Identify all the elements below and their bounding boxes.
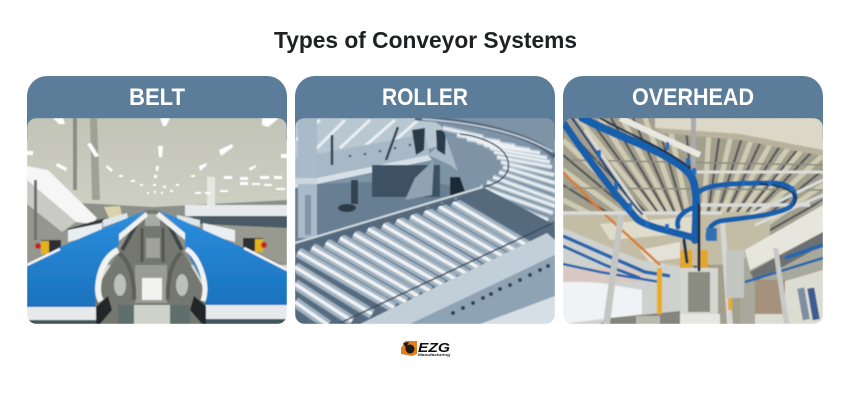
machinery [372, 165, 440, 197]
title: Types of Conveyor Systems [274, 27, 577, 53]
emergency boxes [41, 240, 61, 254]
panel: belt [27, 76, 287, 324]
lower right wall [740, 200, 823, 324]
white belt rollers [98, 250, 118, 301]
icon: logo mark [401, 341, 417, 356]
overhead header [563, 76, 823, 140]
white wall [563, 280, 642, 324]
side frame [360, 233, 555, 324]
belt header: BELT [129, 84, 185, 111]
columns [603, 215, 624, 324]
upper conveyor [295, 118, 448, 158]
logo wordmark: EZG [418, 340, 450, 355]
ceiling panels [563, 118, 823, 270]
upper rail [295, 187, 483, 243]
curved rollers [444, 132, 497, 192]
panel: overhead [563, 76, 823, 324]
roller header [295, 76, 555, 140]
spray booth [680, 268, 718, 320]
overhead header: OVERHEAD [632, 84, 754, 111]
main blue overhead track [563, 118, 796, 270]
frame and white box [135, 265, 167, 303]
side guards [68, 223, 102, 242]
logo tagline: Manufacturing [418, 353, 450, 357]
overhead conveyor photo [563, 118, 823, 324]
logo: EZG Manufacturing [401, 340, 450, 357]
blue belts [27, 210, 146, 307]
distant blue conveyors [563, 236, 823, 282]
incline conveyor left [34, 224, 78, 245]
white pipes [620, 118, 700, 155]
roof beam [655, 118, 823, 150]
straight roller bed [295, 187, 555, 324]
roller conveyor photo [295, 118, 555, 325]
center machinery [95, 210, 205, 324]
belt conveyor photo [27, 118, 287, 324]
mid truss band [563, 212, 770, 268]
panel: roller [295, 76, 555, 325]
white belt bases [27, 307, 96, 320]
orange pipe [563, 172, 660, 265]
roller header: ROLLER [382, 84, 468, 111]
outer rail [415, 118, 555, 157]
belt header [27, 76, 287, 140]
cross beams [563, 160, 823, 190]
lower left bay [563, 228, 690, 324]
post [298, 118, 317, 238]
